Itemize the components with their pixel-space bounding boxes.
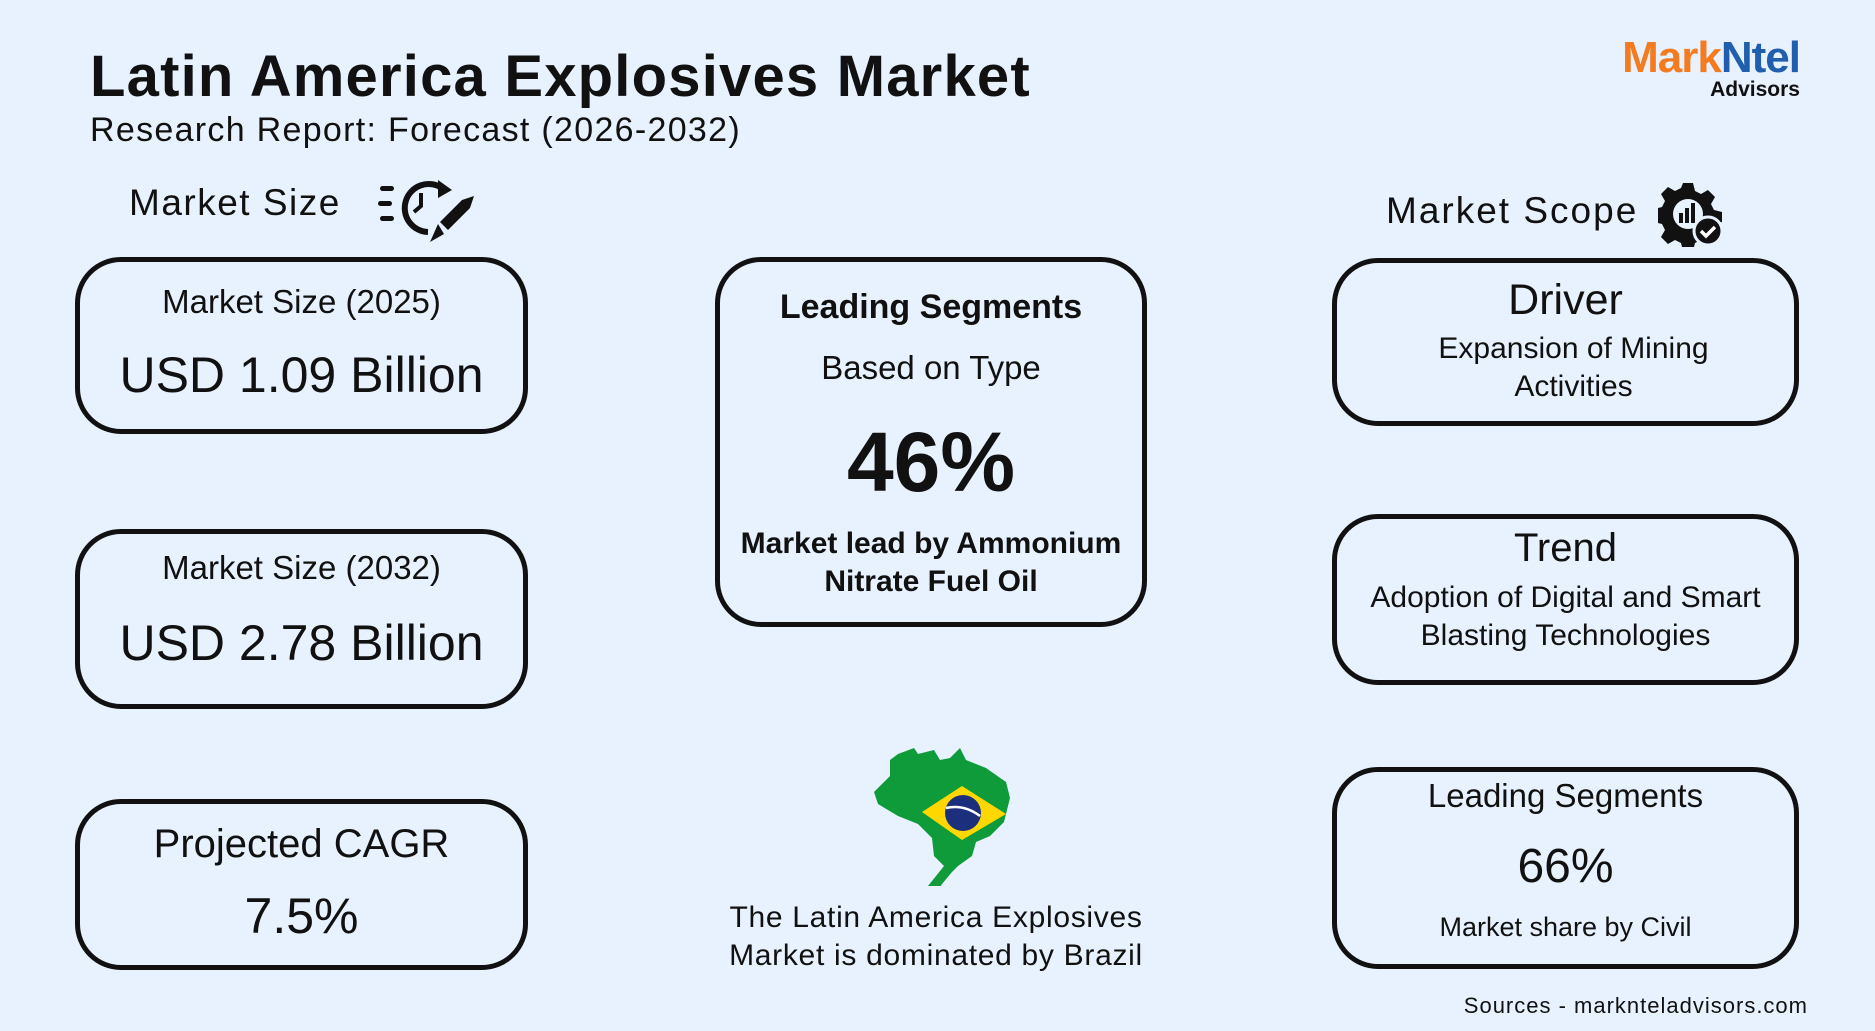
panel: cagr: Projected CAGR [154, 822, 449, 866]
icon: clock rocket [378, 180, 474, 242]
panel: leading segments civil: Leading Segments [1428, 777, 1703, 814]
panel: driver: Expansion of Mining [1438, 332, 1709, 365]
panel: leading segments civil: 66% [1517, 840, 1614, 893]
panel: market size 2025: Market Size (2025) [162, 283, 441, 320]
panel: leading segments type [715, 257, 1147, 627]
panel: leading segments type: Leading Segments [780, 288, 1082, 326]
panel: cagr: 7.5% [245, 888, 358, 944]
panel: leading segments type: 46% [847, 415, 1015, 509]
text: brazil dominance: Market is dominated by Brazil [729, 939, 1143, 972]
icon: brazil map flag [874, 748, 1010, 886]
panel: leading segments civil [1332, 767, 1799, 969]
panel: trend: Adoption of Digital and Smart [1370, 581, 1761, 614]
title: Latin America Explosives Market [90, 44, 1031, 109]
panel: leading segments civil: Market share by Civil [1439, 912, 1692, 942]
panel: market size 2025 [75, 257, 528, 434]
panel: driver: Driver [1508, 276, 1623, 324]
panel: market size 2025: USD 1.09 Billion [119, 347, 484, 403]
icon: gear chart check [1658, 183, 1722, 247]
heading: market scope: Market Scope [1386, 190, 1638, 231]
panel: driver: Activities [1514, 370, 1633, 403]
text: brazil dominance [729, 901, 1143, 972]
panel: driver [1332, 258, 1799, 426]
logo: Advisors [1710, 78, 1800, 101]
panel: market size 2032: Market Size (2032) [162, 549, 441, 586]
subtitle: Research Report: Forecast (2026-2032) [90, 111, 741, 149]
text: brazil dominance: The Latin America Explosives [729, 901, 1143, 934]
logo: MarkNtel [1622, 33, 1800, 82]
panel: market size 2032 [75, 529, 528, 709]
panel: leading segments type: Market lead by Ammonium [741, 527, 1121, 560]
panel: trend: Trend [1514, 526, 1617, 570]
panel: market size 2032: USD 2.78 Billion [119, 615, 484, 671]
panel: trend: Blasting Technologies [1421, 619, 1710, 652]
sources: Sources - marknteladvisors.com [1464, 993, 1808, 1018]
panel: leading segments type: Nitrate Fuel Oil [824, 565, 1038, 598]
panel: trend [1332, 514, 1799, 685]
panel: leading segments type: Based on Type [821, 349, 1041, 386]
panel: cagr [75, 799, 528, 970]
heading: market size: Market Size [129, 182, 341, 223]
